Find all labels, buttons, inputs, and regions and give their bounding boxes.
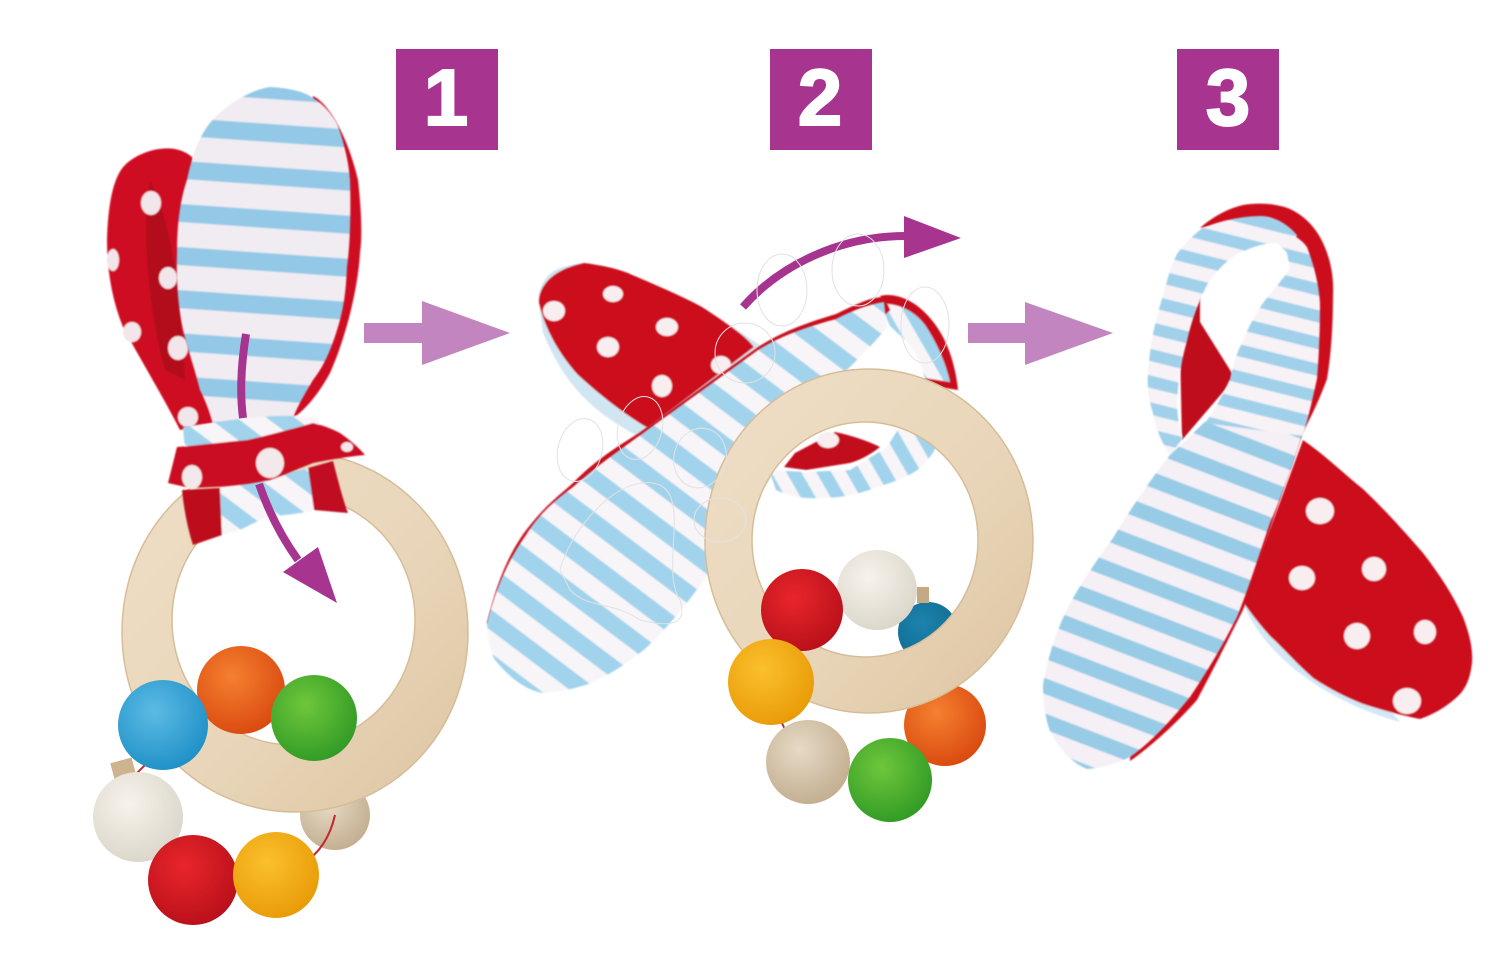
step 2 number badge: 2	[798, 53, 842, 142]
knot band	[168, 416, 365, 489]
striped blue ear	[177, 87, 350, 425]
step 2 number badge	[770, 49, 872, 150]
arrow: step 1 to step 2	[364, 301, 510, 365]
wooden ring	[122, 452, 468, 812]
red polka-dot ear	[1243, 440, 1472, 722]
red inner and outer edge	[1130, 204, 1333, 761]
arrow: step 2 to step 3	[968, 302, 1113, 365]
red polka-dot ear	[539, 263, 760, 437]
back fabric loop	[769, 295, 958, 498]
beads	[93, 646, 357, 925]
wooden ring	[705, 369, 1033, 713]
beads	[728, 550, 932, 822]
step 1 number badge	[396, 49, 498, 150]
red edge of striped strip	[487, 297, 890, 640]
striped front strip	[1043, 232, 1320, 769]
striped strip	[487, 302, 887, 693]
knot lower folds	[182, 461, 348, 545]
purple pull arrow	[241, 334, 337, 603]
faint paw watermark	[550, 234, 949, 624]
red polka-dot ear	[107, 148, 215, 430]
wooden bead behind ring	[300, 780, 370, 850]
step 3 number badge: 3	[1206, 53, 1250, 142]
illustration: step 3 fabric tied in a loop	[1043, 204, 1472, 769]
step 3 number badge	[1177, 49, 1279, 150]
striped back of loop	[1148, 216, 1297, 455]
beads behind ring	[898, 587, 986, 766]
red ear lining edge	[280, 96, 361, 418]
illustration: step 1 toy with ears tied	[93, 87, 468, 925]
illustration: step 2 toy with ears unfolded	[487, 216, 1033, 822]
purple turn arrow	[743, 216, 961, 307]
step 1 number badge: 1	[424, 53, 468, 142]
